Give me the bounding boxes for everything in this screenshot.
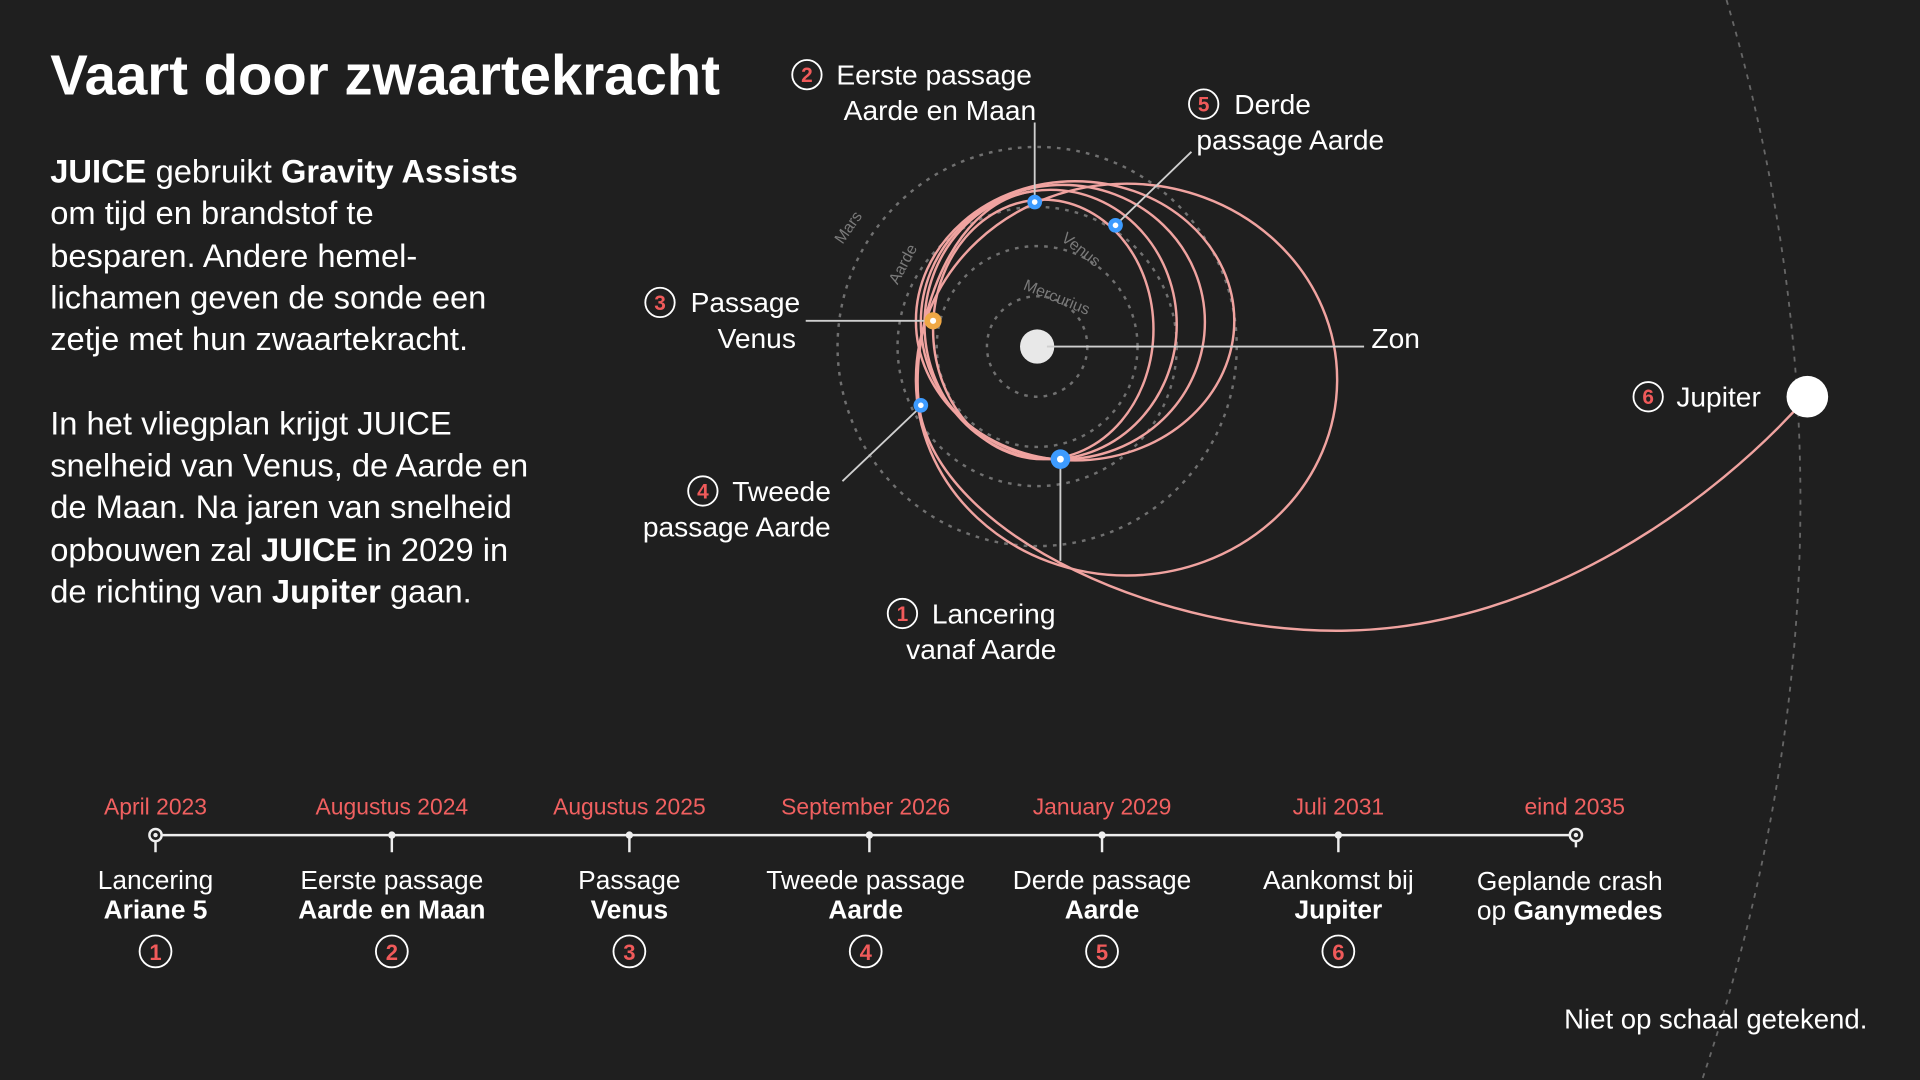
timeline labels: Aankomst bij bbox=[1263, 865, 1414, 895]
timeline labels: Geplande crash bbox=[1477, 866, 1663, 896]
timeline labels: Jupiter bbox=[1295, 894, 1382, 924]
diagram labels: 3 bbox=[654, 292, 666, 315]
timeline number badges bbox=[140, 936, 1354, 967]
timeline bbox=[98, 793, 1663, 967]
diagram labels: passage Aarde bbox=[1196, 124, 1384, 155]
timeline labels: Aarde en Maan bbox=[298, 894, 485, 924]
trajectories bbox=[916, 181, 1807, 631]
diagram labels: Tweede bbox=[732, 476, 831, 507]
intro text: om tijd en brandstof te bbox=[50, 194, 374, 231]
timeline labels: Aarde bbox=[1065, 894, 1139, 924]
timeline dates bbox=[104, 793, 1625, 819]
timeline dates: January 2029 bbox=[1033, 793, 1171, 819]
intro text: besparen. Andere hemel- bbox=[50, 237, 417, 274]
timeline number badges: 4 bbox=[860, 940, 873, 965]
timeline labels: Tweede passage bbox=[766, 865, 965, 895]
intro text: zetje met hun zwaartekracht. bbox=[50, 320, 468, 357]
timeline labels: Ariane 5 bbox=[104, 894, 207, 924]
diagram labels: Zon bbox=[1371, 323, 1420, 354]
diagram labels bbox=[643, 59, 1761, 665]
jupiter bbox=[1787, 376, 1828, 418]
diagram labels: Passage bbox=[691, 287, 800, 318]
orbit diagram: Aarde bbox=[886, 242, 921, 287]
diagram labels: 2 bbox=[801, 64, 813, 87]
diagram labels: Aarde en Maan bbox=[844, 95, 1036, 126]
timeline labels bbox=[98, 865, 1663, 926]
diagram labels: Derde bbox=[1234, 89, 1311, 120]
intro text: opbouwen zal JUICE in 2029 in bbox=[50, 531, 508, 568]
title: Vaart door zwaartekracht bbox=[50, 43, 720, 106]
timeline labels: Lancering bbox=[98, 865, 213, 895]
timeline labels: Aarde bbox=[828, 894, 903, 924]
timeline labels: Passage bbox=[578, 865, 681, 895]
diagram labels: 1 bbox=[897, 603, 908, 626]
timeline dates: Juli 2031 bbox=[1293, 793, 1384, 819]
intro text: JUICE gebruikt Gravity Assists bbox=[50, 152, 518, 189]
leader lines bbox=[806, 122, 1364, 561]
intro text: de richting van Jupiter gaan. bbox=[50, 572, 472, 609]
diagram labels: 6 bbox=[1642, 386, 1654, 409]
timeline dates: April 2023 bbox=[104, 793, 207, 819]
timeline labels: Venus bbox=[591, 894, 668, 924]
diagram labels: Lancering bbox=[932, 598, 1056, 629]
diagram labels: 4 bbox=[697, 480, 709, 503]
diagram labels: Venus bbox=[718, 323, 796, 354]
orbit diagram: Mars bbox=[832, 208, 866, 247]
timeline dates: eind 2035 bbox=[1524, 793, 1625, 819]
orbit diagram: Venus bbox=[1058, 230, 1103, 270]
timeline number badges: 5 bbox=[1096, 940, 1108, 965]
timeline dates: September 2026 bbox=[781, 793, 950, 819]
timeline number badges: 3 bbox=[623, 940, 636, 965]
timeline labels: Eerste passage bbox=[300, 865, 483, 895]
timeline labels: Derde passage bbox=[1013, 865, 1191, 895]
intro text bbox=[50, 152, 528, 609]
sun bbox=[1020, 329, 1054, 364]
timeline number badges: 1 bbox=[149, 940, 162, 965]
diagram labels: 5 bbox=[1198, 93, 1209, 116]
markers bbox=[913, 195, 1123, 469]
intro text: lichamen geven de sonde een bbox=[50, 279, 486, 316]
intro text: In het vliegplan krijgt JUICE bbox=[50, 405, 452, 442]
diagram labels: Eerste passage bbox=[836, 59, 1032, 90]
intro text: de Maan. Na jaren van snelheid bbox=[50, 488, 512, 525]
timeline number badges: 2 bbox=[386, 940, 398, 965]
timeline number badges: 6 bbox=[1332, 940, 1345, 965]
intro text: snelheid van Venus, de Aarde en bbox=[50, 446, 528, 483]
diagram labels: passage Aarde bbox=[643, 511, 831, 542]
orbit diagram: Mercurius bbox=[1021, 277, 1092, 319]
diagram labels: Jupiter bbox=[1676, 382, 1761, 413]
timeline labels: op Ganymedes bbox=[1477, 896, 1663, 926]
orbit diagram bbox=[806, 122, 1828, 631]
footnote: Niet op schaal getekend. bbox=[1564, 1004, 1867, 1035]
timeline dates: Augustus 2025 bbox=[553, 793, 706, 819]
timeline dates: Augustus 2024 bbox=[316, 793, 468, 819]
diagram labels: vanaf Aarde bbox=[906, 634, 1056, 665]
